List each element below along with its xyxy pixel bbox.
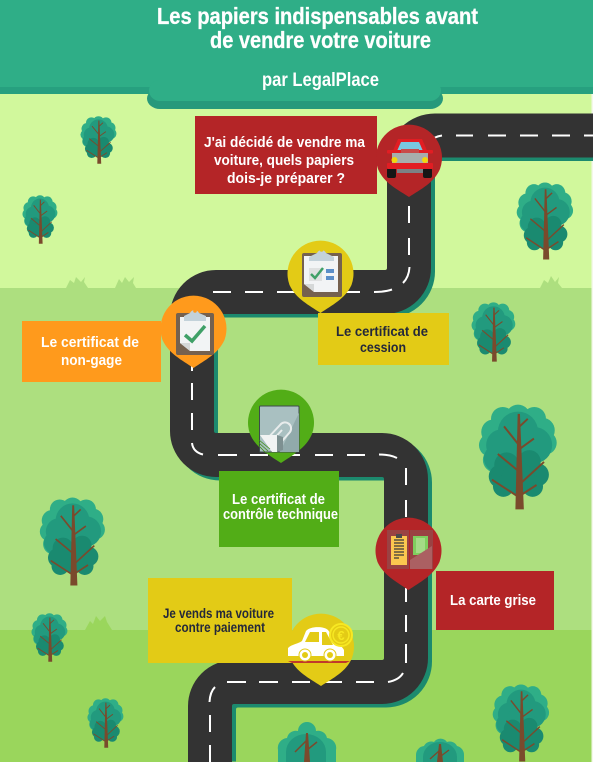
- step 5: folder pin: [376, 518, 442, 590]
- step 1: question box: [195, 116, 377, 194]
- header banner: [0, 0, 593, 109]
- tree 10: [278, 722, 336, 762]
- step 6: paiement box: Je vends ma voiture: [163, 606, 274, 621]
- title: [157, 3, 478, 53]
- tree 1: [80, 116, 116, 164]
- icon: red car: [387, 139, 433, 178]
- step 3: certificat de non-gage box: non-gage: [61, 353, 122, 369]
- step 2: certificat de cession box: [318, 313, 449, 365]
- road: [192, 136, 593, 762]
- step 5: carte grise box: [436, 571, 554, 630]
- tree 3: [517, 182, 573, 260]
- tree 11: [416, 739, 464, 762]
- icon: clipboard with checklist: [302, 248, 342, 297]
- step 3: certificat de non-gage box: [22, 321, 161, 382]
- step 1: question box: voiture, quels papiers: [214, 152, 354, 169]
- tree 2: [22, 195, 57, 244]
- step 1: car pin: [376, 125, 442, 197]
- icon: white car with euro coin: €: [337, 628, 345, 643]
- title: Les papiers indispensables avant: [157, 3, 478, 29]
- title: de vendre votre voiture: [210, 27, 431, 53]
- step 4: contrôle technique box: Le certificat de: [232, 492, 325, 508]
- step 5: carte grise box: La carte grise: [450, 592, 536, 609]
- step 2: certificat de cession box: cession: [360, 339, 406, 355]
- tree 5: [479, 405, 557, 509]
- step 1: question box: J'ai décidé de vendre ma: [204, 134, 366, 151]
- step 6: paiement box: contre paiement: [175, 620, 265, 635]
- tree 4: [472, 302, 515, 362]
- icon: clipboard with check: [176, 309, 214, 355]
- step 2: certificat de cession box: Le certificat de: [336, 323, 428, 339]
- tree 8: [87, 698, 123, 748]
- step 3: clipboard pin: [160, 296, 226, 368]
- icon: folder with documents: [387, 530, 433, 569]
- step 4: document pin: [248, 390, 314, 463]
- step 2: clipboard pin: [287, 241, 354, 313]
- tree 9: [493, 684, 549, 762]
- tree 7: [31, 613, 67, 662]
- tree 6: [40, 498, 105, 585]
- step 6: car and coin pin: [288, 614, 354, 686]
- step 4: contrôle technique box: [219, 471, 339, 547]
- step 1: question box: dois-je préparer ?: [227, 170, 345, 187]
- icon: document with paperclip: [259, 406, 299, 453]
- step 3: certificat de non-gage box: Le certificat de: [41, 335, 139, 351]
- subtitle: par LegalPlace: [262, 70, 379, 91]
- step 4: contrôle technique box: contrôle technique: [223, 507, 338, 523]
- step 6: paiement box: [148, 578, 292, 663]
